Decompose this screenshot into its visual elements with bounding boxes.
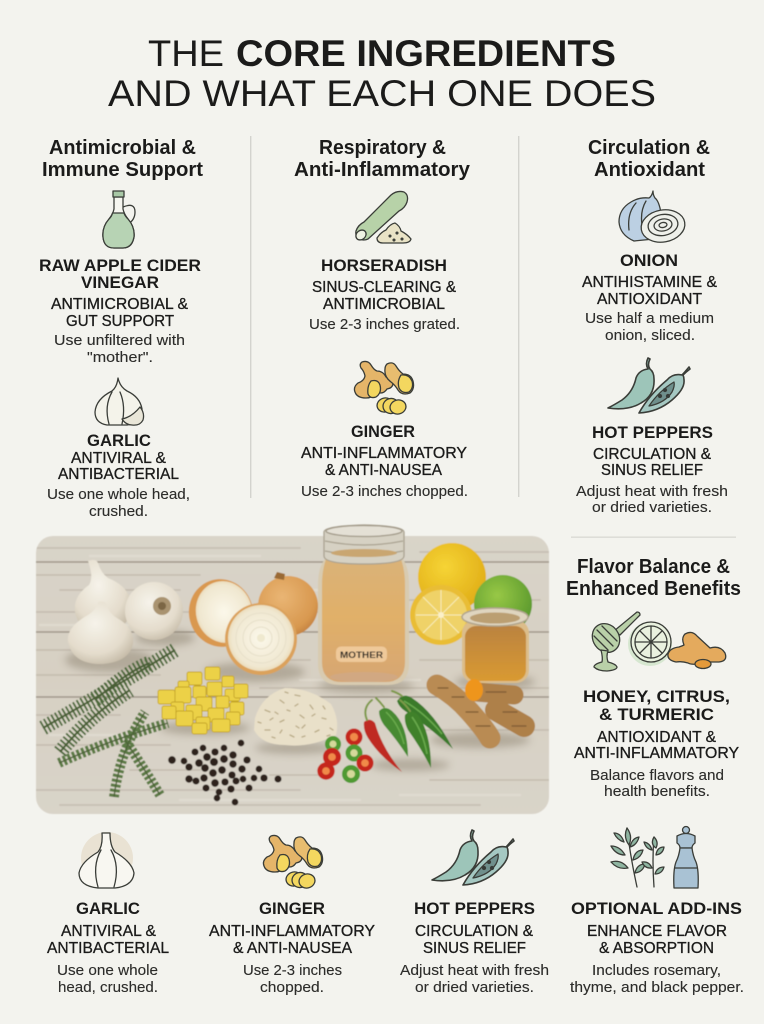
text: hot peppers summary: CIRCULATION & (415, 923, 533, 940)
text: raw apple cider vinegar (39, 256, 201, 366)
onions (181, 572, 318, 675)
text: hot peppers summary: or dried varieties. (415, 979, 534, 996)
text: ginger: & ANTI-NAUSEA (325, 462, 443, 479)
text: garlic summary: Use one whole (57, 962, 158, 979)
text: horseradish: SINUS-CLEARING & (312, 279, 456, 296)
panel: optional add-ins (570, 826, 744, 996)
text: honey, citrus and turmeric: ANTIOXIDANT & (597, 729, 716, 746)
heading: flavor balance: Enhanced Benefits (566, 577, 741, 600)
icon: vinegar bottle (103, 191, 135, 248)
lemons and lime (410, 543, 532, 645)
panel: bottom garlic (47, 832, 169, 996)
text: hot peppers summary (400, 899, 549, 996)
heading: respiratory: Respiratory & (319, 136, 446, 159)
text: optional add-ins: ENHANCE FLAVOR (587, 923, 727, 940)
icon: herbs and pepper mill (611, 826, 698, 888)
text: ginger summary: GINGER (259, 899, 325, 918)
heading: circulation (588, 136, 710, 181)
text: optional add-ins: OPTIONAL ADD-INS (571, 899, 742, 918)
text: garlic: crushed. (89, 503, 148, 520)
text: hot peppers: Adjust heat with fresh (576, 483, 728, 500)
text: honey, citrus and turmeric: HONEY, CITRUS, (583, 687, 730, 706)
text: ginger (301, 422, 468, 500)
icon: peppers (432, 830, 514, 885)
text: ginger summary: Use 2-3 inches (243, 962, 342, 979)
icon: garlic bulb (79, 832, 134, 888)
title (108, 33, 656, 114)
text: raw apple cider vinegar: ANTIMICROBIAL & (51, 296, 188, 313)
text: ginger summary: ANTI-INFLAMMATORY (209, 923, 375, 940)
text: raw apple cider vinegar: Use unfiltered with (54, 332, 185, 349)
rosemary sprigs (43, 650, 175, 752)
black peppercorns (168, 740, 281, 805)
text: hot peppers: SINUS RELIEF (601, 462, 703, 479)
text: hot peppers: CIRCULATION & (593, 446, 711, 463)
icon: ginger (354, 361, 414, 416)
icon: ginger root (263, 835, 323, 890)
heading: respiratory (294, 136, 471, 181)
text: garlic summary: head, crushed. (58, 979, 158, 996)
text: horseradish (309, 256, 460, 333)
text: honey, citrus and turmeric: ANTI-INFLAMMATORY (574, 745, 739, 762)
panel: circulation and antioxidant (576, 136, 728, 516)
text: raw apple cider vinegar: RAW APPLE CIDER (39, 256, 201, 275)
heading: flavor balance (566, 555, 741, 600)
chili peppers (364, 691, 453, 772)
heading: circulation: Circulation & (588, 136, 710, 159)
icon: hot peppers (608, 358, 690, 413)
text: garlic: ANTIVIRAL & (71, 450, 166, 467)
text: ginger: ANTI-INFLAMMATORY (301, 445, 467, 462)
text: honey, citrus and turmeric: & TURMERIC (599, 705, 714, 724)
panel: flavor balance and enhanced benefits (566, 555, 741, 800)
text: horseradish: HORSERADISH (321, 256, 447, 275)
text: horseradish: ANTIMICROBIAL (323, 296, 445, 313)
text: raw apple cider vinegar: GUT SUPPORT (66, 313, 174, 330)
text: hot peppers (576, 423, 728, 516)
ginger cubes (158, 667, 248, 734)
text: optional add-ins: thyme, and black pepper. (570, 979, 744, 996)
text: hot peppers: or dried varieties. (592, 499, 712, 516)
text: honey, citrus and turmeric: Balance flavors and (590, 767, 724, 784)
text: honey, citrus and turmeric: health benefits. (604, 783, 710, 800)
text: garlic summary: ANTIVIRAL & (61, 923, 156, 940)
icon: horseradish (354, 191, 411, 243)
text: ginger summary: & ANTI-NAUSEA (233, 940, 353, 957)
text: raw apple cider vinegar: VINEGAR (81, 273, 159, 292)
text: hot peppers summary: HOT PEPPERS (414, 899, 535, 918)
icon: honey dipper, citrus and turmeric (587, 612, 726, 671)
text: ginger: Use 2-3 inches chopped. (301, 483, 468, 500)
text: onion: onion, sliced. (605, 327, 695, 344)
text: hot peppers: HOT PEPPERS (592, 423, 713, 442)
text: raw apple cider vinegar: "mother". (87, 349, 153, 366)
photo: ingredients on a wooden table (36, 525, 549, 814)
heading: circulation: Antioxidant (594, 158, 705, 181)
turmeric roots (437, 679, 526, 738)
heading: antimicrobial: Immune Support (42, 158, 203, 181)
panel: respiratory and anti-inflammatory (294, 136, 471, 500)
heading: antimicrobial: Antimicrobial & (49, 136, 196, 159)
mason jar of cider vinegar (318, 525, 409, 685)
heading: respiratory: Anti-Inflammatory (294, 158, 471, 181)
text: ginger: GINGER (351, 422, 415, 441)
text: onion: ONION (620, 251, 678, 270)
text: hot peppers summary: Adjust heat with fresh (400, 962, 549, 979)
title: CORE INGREDIENTS (236, 33, 616, 74)
text: garlic (47, 431, 190, 520)
text: honey, citrus and turmeric (574, 687, 739, 800)
text: hot peppers summary: SINUS RELIEF (423, 940, 526, 957)
icon: garlic with clove (95, 378, 144, 425)
text: optional add-ins: & ABSORPTION (599, 940, 714, 957)
text: onion: ANTIOXIDANT (597, 291, 702, 308)
text: garlic: Use one whole head, (47, 486, 190, 503)
text: onion: Use half a medium (585, 310, 714, 327)
icon: onion (619, 191, 687, 246)
label: mother (336, 646, 387, 662)
text: ginger summary: chopped. (260, 979, 324, 996)
chili slices (317, 728, 374, 783)
text: horseradish: Use 2-3 inches grated. (309, 316, 460, 333)
heading: antimicrobial (42, 136, 203, 181)
panel: bottom hot peppers (400, 830, 549, 996)
text: garlic: GARLIC (87, 431, 151, 450)
honey jar (462, 608, 529, 683)
text: garlic: ANTIBACTERIAL (58, 466, 179, 483)
title: AND WHAT EACH ONE DOES (108, 73, 656, 114)
text: onion (582, 251, 717, 344)
label: mother: MOTHER (340, 650, 383, 660)
panel: antimicrobial and immune support (39, 136, 203, 520)
heading: flavor balance: Flavor Balance & (577, 555, 730, 578)
panel: bottom ginger (209, 835, 375, 996)
text: garlic summary (47, 899, 169, 996)
text: garlic summary: GARLIC (76, 899, 140, 918)
text: onion: ANTIHISTAMINE & (582, 274, 717, 291)
text: optional add-ins (570, 899, 744, 996)
text: ginger summary (209, 899, 375, 996)
garlic bulbs (68, 560, 183, 664)
grated horseradish (254, 688, 337, 746)
wooden table (36, 536, 549, 814)
text: garlic summary: ANTIBACTERIAL (47, 940, 169, 957)
shadows (65, 630, 535, 771)
thyme sprigs (59, 712, 168, 797)
text: optional add-ins: Includes rosemary, (592, 962, 721, 979)
title: THE (148, 33, 224, 74)
